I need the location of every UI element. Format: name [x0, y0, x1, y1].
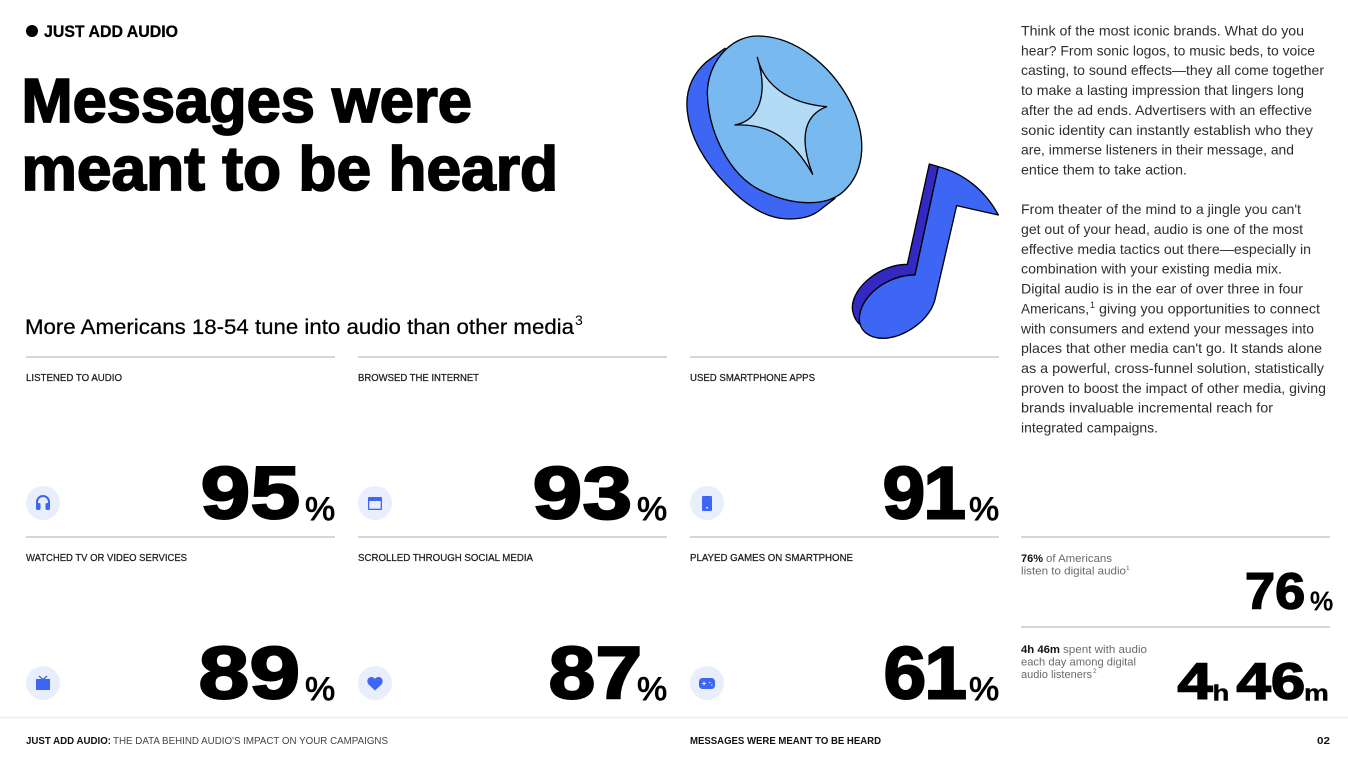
body copy: Think of the most iconic brands. What do you	[1021, 22, 1304, 38]
icon: headphones	[26, 486, 60, 520]
stat card: social media	[358, 537, 667, 714]
footer: JUST ADD AUDIO:	[26, 736, 111, 747]
stat card: played games: PLAYED GAMES ON SMARTPHONE	[690, 552, 853, 564]
body copy: Digital audio is in the ear of over three in four	[1021, 281, 1303, 297]
side stat: 76% digital audio: listen to digital audio	[1021, 566, 1126, 578]
illustration: sonic disc with sparkle	[687, 36, 862, 219]
body copy: entice them to take action.	[1021, 162, 1187, 178]
stat card: listened to audio: 95	[200, 453, 300, 535]
body copy: combination with your existing media mix.	[1021, 261, 1282, 277]
stat card: played games: %	[969, 671, 999, 707]
stat card: used smartphone apps: USED SMARTPHONE APPS	[690, 372, 815, 384]
stat card: listened to audio: LISTENED TO AUDIO	[26, 372, 122, 384]
stat card: played games	[690, 537, 999, 714]
stat card: browsed the internet: 93	[532, 453, 632, 535]
icon: game controller	[690, 666, 724, 700]
title: meant to be heard	[22, 135, 558, 204]
icon: smartphone	[690, 486, 724, 520]
side stat: 76% digital audio: 76%	[1021, 553, 1043, 565]
side stat: 76% digital audio: 1	[1126, 565, 1130, 572]
footer: 02	[1317, 736, 1331, 747]
side stat: 4h 46m listening time: h	[1212, 681, 1229, 706]
stat card: social media: 87	[548, 631, 642, 714]
body copy: sonic identity can instantly establish who they	[1021, 122, 1313, 138]
title	[22, 67, 558, 204]
body copy: proven to boost the impact of other media, giving	[1021, 380, 1326, 396]
side stat: 76% digital audio	[1021, 537, 1333, 620]
stat card: social media: SCROLLED THROUGH SOCIAL MEDIA	[358, 552, 533, 564]
icon: browser window	[358, 486, 392, 520]
subheading: 3	[575, 312, 583, 328]
body copy: casting, to sound effects—they all come together	[1021, 62, 1324, 78]
side stat: 4h 46m listening time: m	[1304, 681, 1329, 706]
illustration: music note	[852, 164, 998, 338]
stat card: listened to audio	[26, 357, 335, 535]
stat card: watched TV	[26, 537, 335, 715]
subheading: More Americans 18-54 tune into audio than other media	[25, 315, 574, 339]
side stat: 4h 46m listening time: 4h 46m	[1021, 644, 1060, 656]
footer	[0, 718, 1348, 747]
side stat: 4h 46m listening time: 46	[1236, 653, 1305, 710]
body copy: to make a lasting impression that lingers long	[1021, 82, 1304, 98]
stat card: social media: %	[637, 671, 667, 707]
body copy: Americans,	[1021, 300, 1089, 316]
body copy: are, immerse listeners in their message, and	[1021, 142, 1294, 158]
stat card: browsed the internet: BROWSED THE INTERNET	[358, 372, 480, 384]
side stat: 4h 46m listening time: 4	[1178, 653, 1213, 710]
side stat: 4h 46m listening time	[1021, 627, 1330, 710]
body copy: hear? From sonic logos, to music beds, to voice	[1021, 42, 1315, 58]
stat card: listened to audio: %	[305, 491, 335, 527]
stat card: watched TV: WATCHED TV OR VIDEO SERVICES	[26, 552, 187, 564]
body copy	[1020, 22, 1326, 436]
body copy: as a powerful, cross-funnel solution, statistically	[1021, 360, 1324, 376]
icon: heart	[358, 666, 392, 700]
title: Messages were	[22, 67, 472, 136]
body copy: with consumers and extend your messages into	[1020, 320, 1314, 336]
side stat: 4h 46m listening time: each day among digital	[1021, 656, 1136, 668]
side stat: 4h 46m listening time: spent with audio	[1063, 644, 1147, 656]
stat card: used smartphone apps: %	[969, 491, 999, 527]
body copy: get out of your head, audio is one of the most	[1021, 221, 1303, 237]
stat card: watched TV: %	[305, 671, 335, 707]
body copy: after the ad ends. Advertisers with an effective	[1021, 102, 1312, 118]
side stat: 4h 46m listening time: 2	[1093, 668, 1097, 675]
stat card: watched TV: 89	[198, 632, 300, 715]
stat card: used smartphone apps	[690, 357, 999, 534]
side stat: 76% digital audio: 76	[1245, 563, 1305, 620]
icon: television	[26, 666, 60, 700]
body copy: integrated campaigns.	[1021, 420, 1158, 436]
section tag: JUST ADD AUDIO	[44, 22, 178, 41]
stat card: browsed the internet: %	[637, 491, 667, 527]
footer: THE DATA BEHIND AUDIO'S IMPACT ON YOUR CAMPAIGNS	[113, 736, 388, 747]
body copy: giving you opportunities to connect	[1099, 300, 1320, 316]
side stat: 76% digital audio: %	[1310, 586, 1333, 616]
body copy: effective media tactics out there—especially in	[1021, 241, 1311, 257]
body copy: 1	[1090, 300, 1095, 310]
side stat: 4h 46m listening time: audio listeners	[1021, 669, 1092, 681]
stat card: played games: 61	[884, 632, 965, 714]
stat card: used smartphone apps: 91	[882, 452, 964, 534]
side stat: 76% digital audio: of Americans	[1046, 553, 1113, 565]
body copy: From theater of the mind to a jingle you can't	[1021, 201, 1301, 217]
body copy: brands invaluable incremental reach for	[1021, 400, 1273, 416]
body copy: places that other media can't go. It stands alone	[1021, 340, 1322, 356]
stat card: browsed the internet	[358, 357, 667, 535]
footer: MESSAGES WERE MEANT TO BE HEARD	[690, 736, 881, 747]
